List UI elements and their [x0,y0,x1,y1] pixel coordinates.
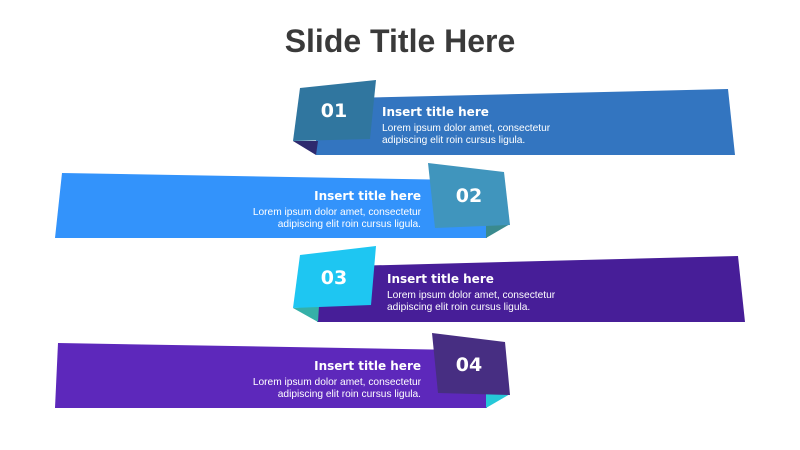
text 03: Insert title here [387,272,494,286]
tab 02: 02 [456,185,482,207]
text 03 [387,272,556,313]
tab 04: 04 [456,354,482,376]
item 03 [293,246,745,322]
text 02: Insert title here [314,189,421,203]
tab 01 [293,80,376,141]
tab 03: 03 [321,267,347,289]
text 01: Insert title here [382,105,489,119]
item 01 [293,80,735,155]
text 01: Lorem ipsum dolor amet, consectetur [382,123,551,134]
text 04 [253,359,422,400]
text 04: Lorem ipsum dolor amet, consectetur [253,377,422,388]
text 03: Lorem ipsum dolor amet, consectetur [387,290,556,301]
item 04 [55,333,510,408]
title: Slide Title Here [285,23,515,59]
text 02: adipiscing elit roin cursus ligula. [278,219,421,230]
text 04: adipiscing elit roin cursus ligula. [278,389,421,400]
item 02 [55,163,510,238]
text 01 [382,105,551,146]
tab 01: 01 [321,100,347,122]
tab 04 [432,333,510,395]
tab 02 [428,163,510,228]
text 01: adipiscing elit roin cursus ligula. [382,135,525,146]
text 03: adipiscing elit roin cursus ligula. [387,302,530,313]
text 02 [253,189,422,230]
tab 03 [293,246,376,308]
text 04: Insert title here [314,359,421,373]
text 02: Lorem ipsum dolor amet, consectetur [253,207,422,218]
